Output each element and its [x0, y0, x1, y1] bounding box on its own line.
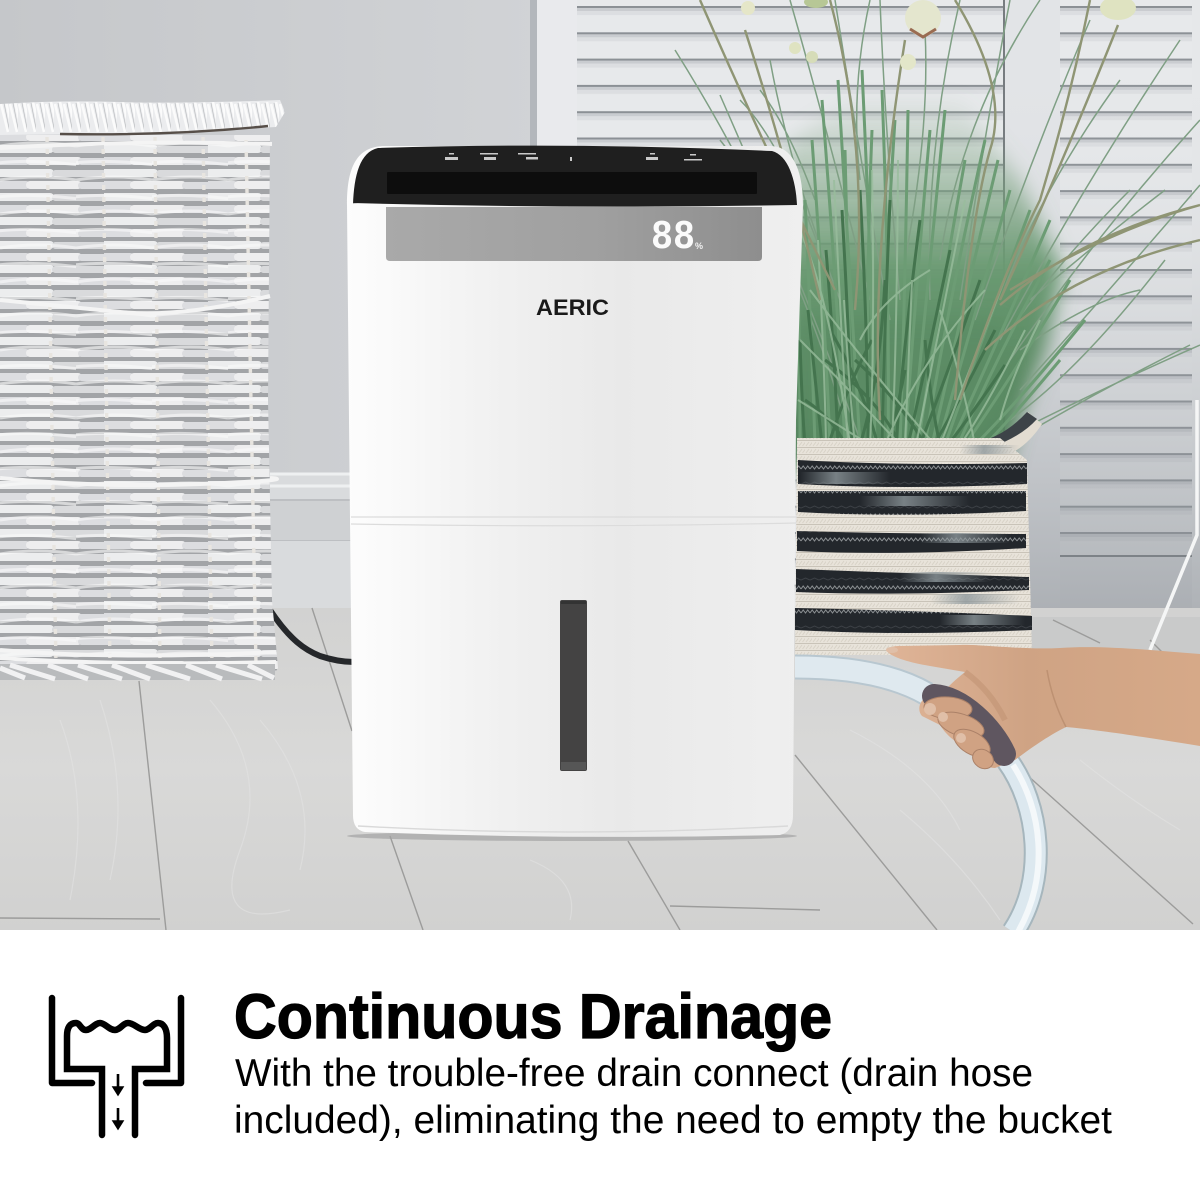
water level window	[560, 600, 587, 771]
floor	[0, 608, 1200, 930]
air vent grille	[387, 172, 757, 194]
hamper bands	[0, 143, 277, 485]
description text: With the trouble-free drain connect (drain hose	[235, 1052, 1033, 1095]
unit body	[347, 146, 803, 837]
right shutter	[1005, 0, 1200, 620]
stand rod	[1150, 400, 1197, 650]
basket dark stripes	[795, 460, 1032, 633]
mid blades	[798, 70, 1085, 445]
dehumidifier	[347, 146, 803, 837]
hand holding hose	[886, 645, 1200, 773]
tank seam	[351, 517, 797, 526]
description text	[234, 1052, 1112, 1142]
hamper base weave	[0, 650, 276, 663]
control icons	[445, 153, 702, 161]
humidity display panel	[386, 207, 762, 261]
fingers	[923, 695, 997, 773]
plant base fill	[798, 320, 1012, 445]
black top panel	[353, 146, 797, 207]
thin upper blades	[675, 0, 1200, 440]
icon: continuous drainage	[52, 998, 181, 1135]
wicker hamper	[0, 100, 285, 680]
nails	[886, 647, 966, 743]
left shutter	[530, 0, 1006, 610]
caption panel	[0, 930, 1200, 1200]
light blades	[798, 160, 1040, 445]
hose in grip	[934, 696, 1004, 754]
wall	[0, 0, 540, 610]
arm and palm	[887, 645, 1200, 768]
brand logo: AERIC	[536, 295, 609, 320]
hamper uprights	[47, 137, 256, 665]
description text: included), eliminating the need to empty the bucket	[234, 1099, 1112, 1142]
dark blades	[800, 190, 1005, 445]
rope basket	[795, 412, 1042, 655]
water and drain pipe	[67, 1023, 167, 1135]
baseboard	[270, 473, 360, 608]
power cord	[270, 610, 354, 662]
basket handle	[975, 412, 1042, 458]
plant dense mass	[780, 100, 1062, 470]
flower buds	[741, 0, 1136, 70]
photo scene: room with dehumidifier	[0, 0, 1200, 932]
plant	[675, 0, 1200, 470]
bucket walls	[52, 998, 181, 1083]
humidity reading: 88	[651, 215, 695, 261]
drain hose	[795, 667, 1039, 932]
tan stems	[700, 0, 1200, 420]
hamper body	[0, 135, 278, 680]
hamper rim	[0, 100, 285, 135]
unit shadow on floor	[347, 831, 797, 841]
flow arrows	[113, 1074, 123, 1129]
basket gray fades	[800, 445, 1025, 625]
heading: Continuous Drainage	[234, 982, 832, 1052]
percent sign: %	[695, 241, 703, 251]
